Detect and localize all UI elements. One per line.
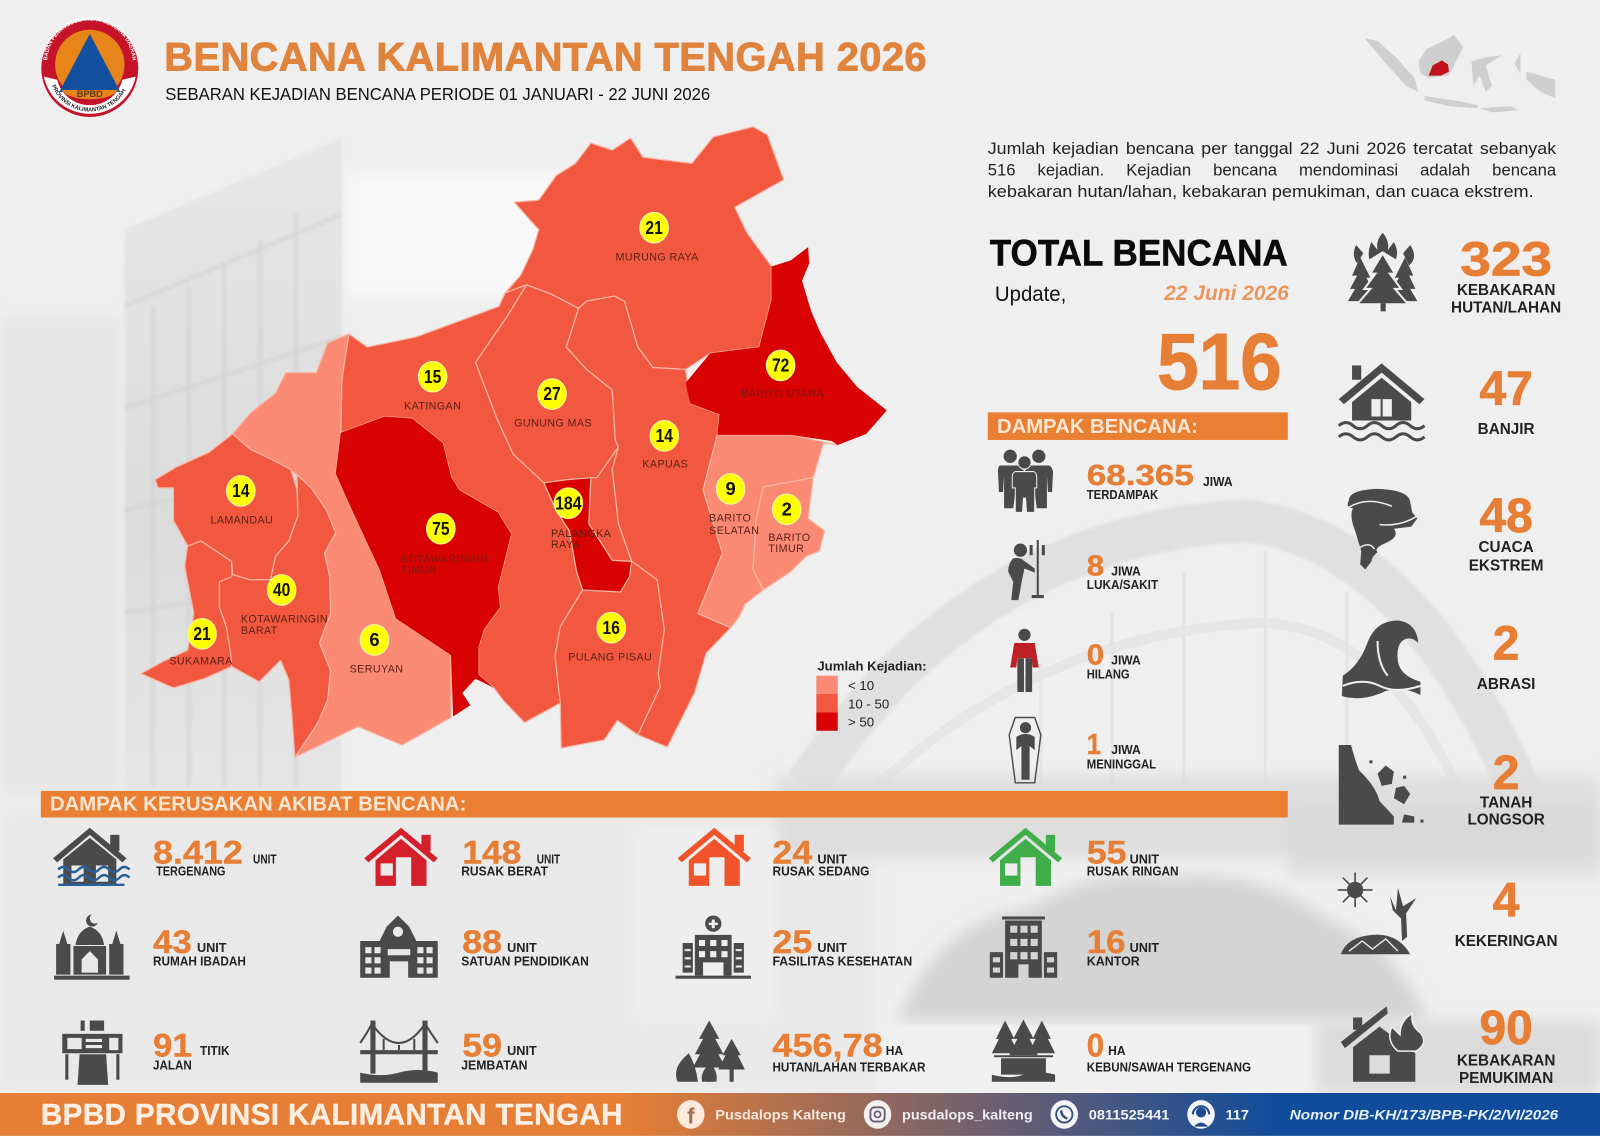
stat: tanah longsor: 2 (1493, 747, 1519, 800)
total number: 516 (1157, 317, 1282, 406)
region: Barito Selatan (698, 435, 838, 628)
Seruyan count (350, 625, 403, 676)
damage: tergenang (53, 828, 277, 886)
damage: satuan pendidikan: SATUAN PENDIDIKAN (461, 953, 589, 968)
damage: rusak sedang: UNIT (817, 851, 847, 866)
damage: kebun/sawah tergenang: KEBUN/SAWAH TERGENANG (1087, 1060, 1251, 1075)
Kapuas count: KAPUAS (642, 458, 688, 470)
Palangka Raya count: 184 (555, 492, 582, 513)
icon: school building (360, 915, 438, 978)
region: Barito Timur (753, 478, 824, 590)
damage: rusak sedang: RUSAK SEDANG (772, 864, 869, 879)
damage: hutan/lahan terbakar: HUTAN/LAHAN TERBAKAR (772, 1060, 926, 1075)
region: Pulang Pisau (555, 561, 664, 748)
icon: red house (364, 828, 438, 886)
Katingan count (404, 361, 461, 412)
Lamandau count: 14 (232, 480, 250, 501)
stat: kekeringan: KEKERINGAN (1455, 933, 1558, 950)
damage: rumah ibadah: UNIT (197, 940, 227, 955)
stat: cuaca ekstrem: EKSTREM (1469, 558, 1544, 575)
region: Barito Utara (686, 247, 887, 445)
Sukamara count: 21 (193, 623, 211, 644)
impact: luka/sakit: 8 (1087, 551, 1104, 583)
Kapuas count: 14 (656, 425, 674, 446)
Kotawaringin Timur count: 75 (432, 518, 449, 539)
Palangka Raya count: RAYA (551, 539, 581, 551)
stat: kebakaran hutan/lahan: 323 (1460, 234, 1552, 287)
impact: terdampak: 68.365 (1087, 460, 1194, 492)
logo BPBD (41, 17, 138, 117)
footer: whatsapp (1051, 1100, 1169, 1129)
impact: meninggal: MENINGGAL (1087, 757, 1156, 772)
map legend: 10 - 50 (848, 696, 889, 711)
map legend: < 10 (848, 678, 874, 693)
icon: coffin (1009, 717, 1041, 783)
Barito Selatan count: 9 (726, 478, 736, 499)
stat: kebakaran hutan/lahan (1348, 233, 1561, 316)
damage: jembatan: 59 (462, 1026, 502, 1063)
stat: kebakaran pemukiman: KEBAKARAN (1457, 1052, 1555, 1069)
Murung Raya count (616, 212, 699, 263)
Barito Timur count: BARITO (768, 532, 810, 544)
icon: bridge (360, 1021, 438, 1083)
Sukamara count: SUKAMARA (169, 655, 233, 667)
damage: rusak ringan: RUSAK RINGAN (1087, 864, 1179, 879)
Murung Raya count: MURUNG RAYA (616, 251, 699, 263)
stat: kebakaran pemukiman (1341, 1002, 1555, 1087)
intro paragraph: kebakaran hutan/lahan, kebakaran pemukiman, dan cuaca ekstrem. (988, 182, 1534, 201)
title: BENCANA KALIMANTAN TENGAH 2026 (164, 36, 927, 80)
damage: jalan: JALAN (153, 1058, 192, 1073)
damage: tergenang: 8.412 (153, 833, 243, 870)
damage: rumah ibadah: RUMAH IBADAH (153, 953, 246, 968)
intro paragraph (988, 139, 1557, 201)
damage: fasilitas kesehatan (676, 915, 912, 979)
logo BPBD: BADAN PENANGGULANGAN BENCANA DAERAH (43, 17, 136, 60)
damage: kantor: UNIT (1130, 940, 1159, 955)
Pulang Pisau count: PULANG PISAU (568, 651, 652, 663)
map legend: Jumlah Kejadian: (817, 659, 927, 674)
Palangka Raya count (551, 488, 612, 551)
damage: satuan pendidikan: 88 (462, 923, 502, 960)
damage: satuan pendidikan (360, 915, 589, 978)
stat: cuaca ekstrem (1348, 489, 1544, 575)
heading bar: dampak bencana (988, 412, 1288, 440)
damage: jalan: TITIK (200, 1043, 230, 1058)
damage: hutan/lahan terbakar: 456,78 (772, 1026, 883, 1063)
stat: abrasi (1342, 617, 1535, 698)
icon: forest fire (676, 1021, 745, 1082)
damage: fasilitas kesehatan: FASILITAS KESEHATAN (772, 953, 912, 968)
icon: patient with IV stand (1008, 540, 1045, 600)
stat: cuaca ekstrem: 48 (1479, 490, 1533, 543)
footer bar: BPBD PROVINSI KALIMANTAN TENGAH (41, 1099, 622, 1132)
heading bar: dampak kerusakan: DAMPAK KERUSAKAN AKIBAT BENCANA: (50, 793, 466, 815)
icon: hospital (676, 915, 751, 979)
map legend: > 50 (848, 715, 874, 730)
Kotawaringin Timur count: KOTAWARINGIN (401, 553, 488, 565)
damage: hutan/lahan terbakar: HA (886, 1043, 903, 1058)
stat: banjir (1339, 363, 1535, 440)
impact: hilang (1010, 629, 1141, 692)
stat: banjir: 47 (1479, 363, 1533, 416)
icon: flooded house (1339, 363, 1424, 440)
region: Seruyan (233, 334, 451, 757)
stat: kebakaran pemukiman: 90 (1479, 1002, 1533, 1055)
icon: tornado (1348, 489, 1417, 570)
Seruyan count: 6 (369, 629, 380, 650)
impact: luka/sakit: LUKA/SAKIT (1087, 577, 1158, 592)
damage: satuan pendidikan: UNIT (507, 940, 537, 955)
stat: cuaca ekstrem: CUACA (1478, 539, 1534, 556)
intro paragraph: 516 kejadian. Kejadian bencana mendominasi adalah bencana (988, 161, 1557, 180)
heading bar: dampak bencana: DAMPAK BENCANA: (997, 416, 1198, 438)
footer: facebook: Pusdalops Kalteng (715, 1108, 846, 1124)
map labels and counts (169, 212, 825, 676)
icon: road sign (62, 1021, 122, 1085)
damage: fasilitas kesehatan: UNIT (817, 940, 847, 955)
damage: rusak sedang: 24 (772, 833, 812, 870)
damage: kebun/sawah tergenang: HA (1108, 1043, 1126, 1058)
update date: 22 Juni 2026 (1163, 281, 1290, 305)
Barito Timur count (768, 494, 810, 555)
damage: rusak ringan (989, 828, 1179, 886)
stat: tanah longsor: LONGSOR (1467, 812, 1545, 829)
logo BPBD: PROVINSI KALIMANTAN TENGAH (52, 84, 126, 112)
impact: hilang: JIWA (1111, 652, 1141, 667)
stat: abrasi: ABRASI (1477, 676, 1535, 693)
footer: document number: Nomor DIB-KH/173/BPB-PK/2/VI/2026 (1290, 1108, 1559, 1123)
Barito Utara count (741, 350, 825, 400)
stat: tanah longsor (1339, 745, 1545, 829)
icon: flooded house (53, 828, 130, 886)
icon: people group (998, 450, 1053, 512)
Kotawaringin Barat count (241, 575, 328, 637)
damage: rusak berat: RUSAK BERAT (461, 864, 548, 879)
region: Kapuas (566, 296, 731, 747)
Barito Selatan count: SELATAN (709, 525, 759, 537)
icon: missing person (1010, 629, 1039, 692)
damage: tergenang: UNIT (253, 851, 277, 866)
footer: instagram: pusdalops_kalteng (902, 1108, 1033, 1124)
map of Kalimantan Tengah (141, 127, 887, 757)
damage: rusak berat (364, 828, 560, 886)
region: Palangka Raya (544, 478, 632, 592)
damage: jalan: 91 (153, 1026, 192, 1063)
icon: office building (990, 916, 1057, 978)
icon: mosque (54, 914, 130, 980)
icon: landslide (1339, 745, 1423, 825)
damage: rusak berat: UNIT (537, 851, 560, 866)
footer: facebook: f (687, 1104, 695, 1129)
impact: terdampak (998, 450, 1233, 512)
damage: rumah ibadah (54, 914, 246, 980)
region: Murung Raya (505, 127, 784, 370)
icon: flooded trees (992, 1020, 1055, 1082)
Gunung Mas count (514, 379, 592, 430)
damage: rumah ibadah: 43 (153, 923, 192, 960)
damage: fasilitas kesehatan: 25 (772, 923, 812, 960)
update date (995, 281, 1290, 306)
icon: orange house (678, 828, 751, 886)
update date: Update, (995, 282, 1066, 306)
damage: kebun/sawah tergenang: 0 (1087, 1026, 1104, 1063)
impact: meninggal: 1 (1087, 729, 1101, 761)
stat: kebakaran pemukiman: PEMUKIMAN (1459, 1070, 1553, 1087)
map legend (816, 659, 927, 731)
region: strip beside Palangka Raya (589, 447, 632, 561)
Gunung Mas count: 27 (543, 383, 561, 404)
stat: kebakaran hutan/lahan: KEBAKARAN (1457, 282, 1555, 299)
damage: kebun/sawah tergenang (992, 1020, 1251, 1082)
Gunung Mas count: GUNUNG MAS (514, 418, 592, 430)
impact: hilang: HILANG (1087, 667, 1130, 682)
region: Katingan (341, 285, 583, 723)
footer: whatsapp: 0811525441 (1089, 1108, 1169, 1124)
damage: jalan (62, 1021, 230, 1085)
damage: rusak ringan: 55 (1087, 833, 1127, 870)
Sukamara count (169, 619, 233, 667)
damage: kantor: KANTOR (1087, 953, 1140, 968)
stat: kekeringan (1338, 873, 1558, 954)
damage: hutan/lahan terbakar (676, 1021, 926, 1082)
stat: kekeringan: 4 (1493, 874, 1520, 927)
footer: call center: 117 (1226, 1108, 1249, 1124)
impact: hilang: 0 (1087, 639, 1104, 671)
damage: rusak berat: 148 (462, 833, 521, 870)
damage: jembatan: UNIT (507, 1043, 537, 1058)
impact: terdampak: TERDAMPAK (1087, 487, 1159, 502)
footer: instagram (864, 1100, 1033, 1129)
stat: tanah longsor: TANAH (1480, 794, 1532, 811)
Katingan count: 15 (424, 366, 441, 387)
region: Sukamara (141, 541, 232, 688)
Barito Timur count: TIMUR (768, 543, 804, 555)
icon: drought (1338, 873, 1416, 954)
Murung Raya count: 21 (645, 217, 663, 238)
footer: call center (1187, 1100, 1249, 1129)
impact: meninggal (1009, 717, 1156, 783)
total bencana heading: TOTAL BENCANA (990, 232, 1288, 273)
stat: kebakaran hutan/lahan: HUTAN/LAHAN (1451, 299, 1561, 316)
icon: burning forest (1348, 233, 1417, 311)
Barito Timur count: 2 (782, 498, 792, 519)
stat: banjir: BANJIR (1478, 421, 1535, 438)
damage: kantor: 16 (1087, 923, 1126, 960)
Seruyan count: SERUYAN (350, 664, 403, 676)
Kapuas count (642, 421, 688, 470)
Kotawaringin Timur count (401, 513, 488, 577)
region: Kotawaringin Timur (336, 416, 511, 716)
subtitle: SEBARAN KEJADIAN BENCANA PERIODE 01 JANUARI - 22 JUNI 2026 (165, 84, 710, 104)
footer bar (0, 1093, 1600, 1136)
Barito Selatan count (709, 474, 759, 537)
intro paragraph: Jumlah kejadian bencana per tanggal 22 Juni 2026 tercatat sebanyak (988, 139, 1557, 158)
Barito Utara count: 72 (772, 355, 789, 376)
impact: terdampak: JIWA (1203, 474, 1233, 489)
mini map Indonesia (1364, 35, 1555, 112)
damage: kantor (990, 916, 1159, 978)
Barito Selatan count: BARITO (709, 513, 751, 525)
damage: jembatan: JEMBATAN (461, 1058, 528, 1073)
Kotawaringin Barat count: 40 (273, 579, 290, 600)
heading bar: dampak kerusakan (41, 791, 1288, 817)
Katingan count: KATINGAN (404, 400, 461, 412)
Kotawaringin Barat count: KOTAWARINGIN (241, 614, 328, 626)
Barito Utara count: BARITO UTARA (741, 388, 825, 400)
Palangka Raya count: PALANGKA (551, 528, 612, 540)
Pulang Pisau count (568, 612, 652, 663)
Lamandau count: LAMANDAU (210, 515, 273, 527)
damage: tergenang: TERGENANG (156, 864, 226, 879)
footer: facebook (677, 1100, 846, 1129)
Pulang Pisau count: 16 (603, 617, 620, 638)
damage: rusak sedang (678, 828, 869, 886)
Kotawaringin Timur count: TIMUR (401, 565, 437, 577)
impact: luka/sakit (1008, 540, 1158, 600)
impact: meninggal: JIWA (1111, 742, 1141, 757)
icon: green house (989, 828, 1062, 886)
icon: wave (1342, 621, 1420, 698)
impact: luka/sakit: JIWA (1111, 564, 1141, 579)
Kotawaringin Barat count: BARAT (241, 625, 278, 637)
damage: jembatan (360, 1021, 537, 1083)
Lamandau count (210, 476, 273, 527)
stat: abrasi: 2 (1493, 617, 1519, 670)
icon: house on fire (1341, 1006, 1424, 1082)
logo BPBD: BPBD (77, 89, 103, 99)
region: Kotawaringin Barat (219, 475, 336, 757)
damage: rusak ringan: UNIT (1130, 851, 1159, 866)
region: Gunung Mas (476, 285, 618, 483)
region: Lamandau (155, 434, 298, 580)
